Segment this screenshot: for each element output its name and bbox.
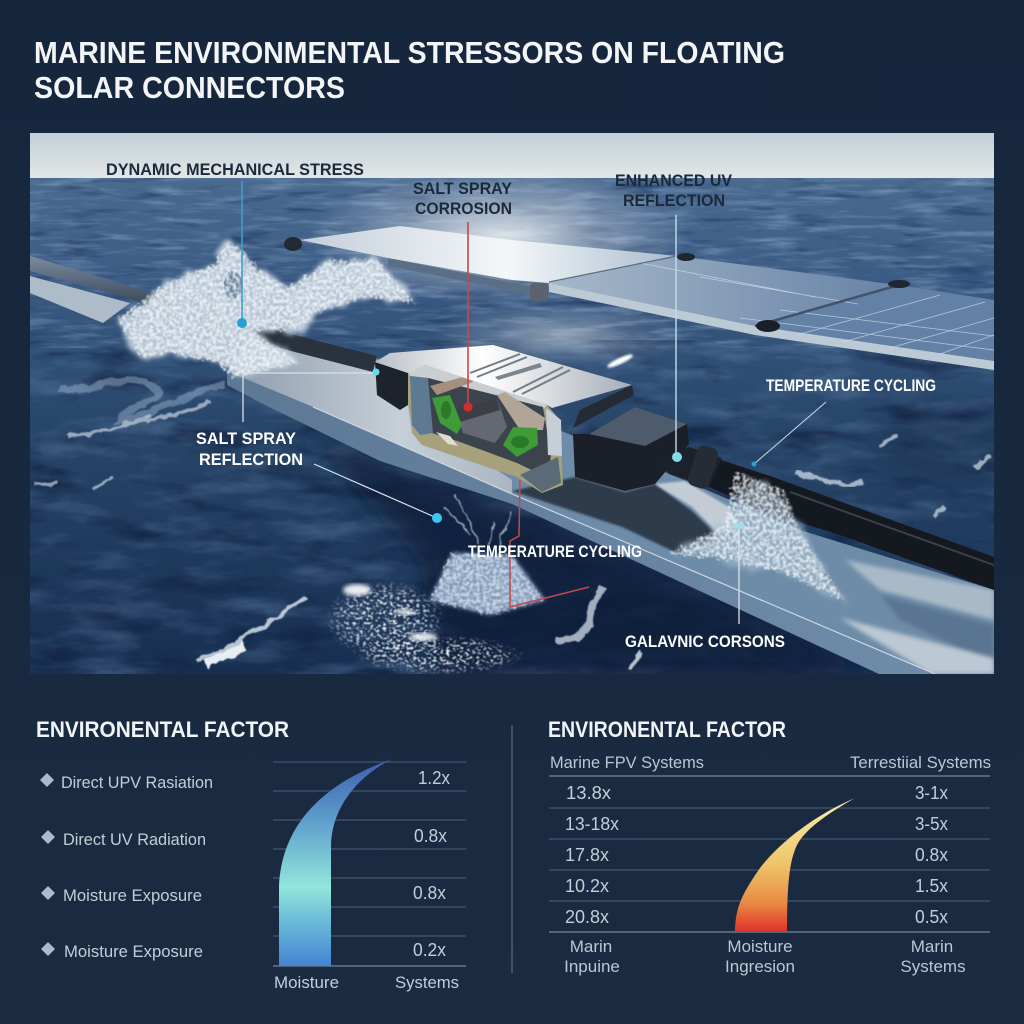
callout: dynamic mechanical stress: DYNAMIC MECHANICAL STRESS — [106, 160, 364, 179]
platform beam — [227, 335, 994, 674]
callout: temperature cycling right — [752, 376, 936, 466]
platform top surface — [227, 335, 994, 674]
curve chart: left — [273, 759, 466, 992]
comparison table: 3-5x — [915, 814, 948, 834]
callout: salt spray corrosion — [413, 179, 513, 412]
comparison table: 10.2x — [565, 876, 609, 896]
sky — [30, 133, 994, 178]
divider between panels — [511, 725, 513, 973]
curve chart: left: Systems — [395, 973, 459, 992]
comparison table: Terrestiial Systems — [850, 753, 991, 772]
panel: right environmental factor table — [548, 717, 991, 976]
left pontoon pipe — [30, 276, 130, 323]
comparison table: 0.5x — [915, 907, 948, 927]
cable left — [256, 326, 377, 372]
curve chart: left: 0.8x — [413, 883, 446, 903]
splash: right of connector — [669, 470, 862, 600]
callout: galvanic corrosion: GALAVNIC CORSONS — [625, 632, 785, 651]
curve chart: left: 0.2x — [413, 940, 446, 960]
callout: salt spray reflection: SALT SPRAY — [196, 429, 297, 448]
foam streaks on water — [36, 402, 990, 670]
splash: left wave — [60, 240, 417, 420]
cutaway frame — [408, 365, 563, 493]
wire bundles — [497, 392, 545, 430]
platform front face — [227, 372, 935, 674]
curve chart: left: Moisture — [274, 973, 339, 992]
callout: salt spray corrosion: CORROSION — [415, 199, 512, 218]
title: MARINE ENVIRONMENTAL STRESSORS ON FLOATING — [34, 35, 785, 70]
column labels: Moisture — [727, 937, 793, 956]
splash: lower centre — [430, 495, 545, 615]
green corrosion growth — [432, 395, 462, 434]
comparison table: 1.5x — [915, 876, 948, 896]
callout: temperature cycling lower — [468, 480, 642, 607]
sea surface — [30, 165, 1024, 674]
factor list: Moisture Exposure — [63, 886, 202, 905]
column labels: Systems — [900, 957, 966, 976]
callout: salt spray corrosion: SALT SPRAY — [413, 179, 513, 198]
column labels: Marin — [570, 937, 612, 956]
callout: enhanced UV reflection: REFLECTION — [623, 191, 725, 210]
comparison table: 13-18x — [565, 814, 619, 834]
factor list: Direct UV Radiation — [63, 830, 206, 849]
title — [34, 35, 785, 105]
comparison table: 20.8x — [565, 907, 609, 927]
curve chart: right — [735, 798, 855, 932]
column labels: Marin — [911, 937, 953, 956]
cutaway central block — [455, 398, 507, 443]
panel: left environmental factor chart — [36, 717, 466, 992]
curve chart: left: 0.8x — [414, 826, 447, 846]
callout: enhanced UV reflection: ENHANCED UV — [615, 171, 733, 190]
heading: right: ENVIRONENTAL FACTOR — [548, 717, 786, 742]
comparison table: 13.8x — [566, 783, 611, 803]
column labels: Inpuine — [564, 957, 620, 976]
title: SOLAR CONNECTORS — [34, 70, 345, 105]
column labels — [564, 937, 966, 976]
callout: galvanic corrosion — [625, 523, 785, 651]
sun glints — [325, 352, 634, 675]
panel: photo scene of floating solar connector at sea — [30, 133, 1024, 675]
factor list: Direct UPV Rasiation — [61, 773, 213, 792]
comparison table: 0.8x — [915, 845, 948, 865]
column labels: Ingresion — [725, 957, 795, 976]
factor list: Moisture Exposure — [64, 942, 203, 961]
callout: temperature cycling lower: TEMPERATURE CYCLING — [468, 542, 642, 561]
right cable and collar — [659, 444, 994, 590]
callout: salt spray reflection: REFLECTION — [199, 450, 303, 469]
connector housing — [375, 345, 689, 493]
callout: temperature cycling right: TEMPERATURE CYCLING — [766, 376, 936, 395]
callout: salt spray reflection — [196, 368, 442, 523]
solar panel array — [284, 226, 994, 370]
callout: dynamic mechanical stress — [106, 160, 364, 328]
factor list — [40, 773, 213, 961]
comparison table — [549, 753, 991, 932]
comparison table: 17.8x — [565, 845, 609, 865]
callout: enhanced UV reflection — [615, 171, 733, 462]
right housing block — [573, 385, 634, 428]
comparison table: Marine FPV Systems — [550, 753, 704, 772]
interior — [428, 378, 551, 470]
curve chart: left: 1.2x — [418, 768, 450, 788]
comparison table: 3-1x — [915, 783, 948, 803]
heading: left: ENVIRONENTAL FACTOR — [36, 717, 289, 742]
connector lid — [375, 345, 632, 408]
left housing block — [375, 362, 408, 410]
